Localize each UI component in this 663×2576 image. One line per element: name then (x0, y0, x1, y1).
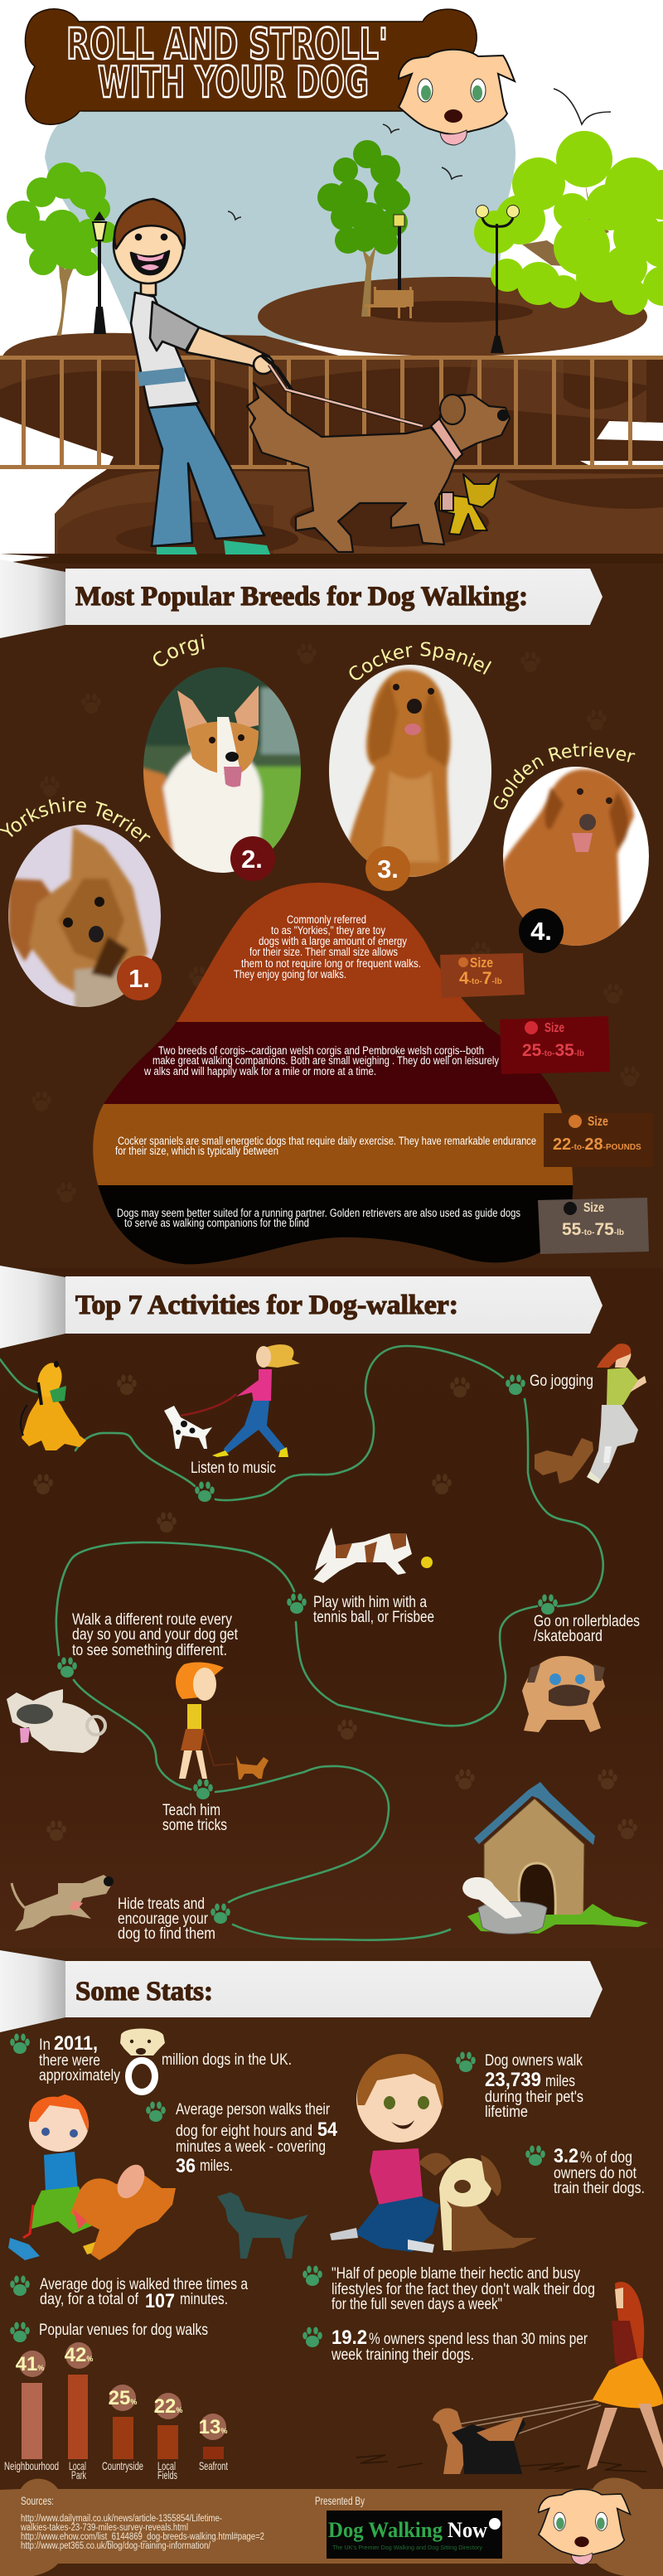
activity labels: Teach him (162, 1802, 220, 1819)
bone (462, 1877, 522, 1919)
number badge 1 (117, 956, 162, 1000)
size tag 2: Size (544, 1021, 564, 1035)
stat: quote: lifestyles for the fact they don't walk their dog (332, 2281, 595, 2298)
footer bone (0, 2478, 663, 2576)
bar chart: venues: 42% (65, 2344, 93, 2366)
boy kneeling with puppy (330, 2054, 537, 2253)
size tag 2 (500, 1016, 610, 1074)
sources: http://www.dailymail.co.uk/news/article-1355854/Lifetime- (21, 2514, 222, 2524)
brown dog running (535, 1438, 593, 1484)
doghouse (462, 1782, 648, 1934)
text: yorkie: for their size. Their small size allows (249, 946, 398, 958)
dog walking now logo: Dog Walking (328, 2518, 443, 2542)
stat: walked three times: day, for a total of (40, 2291, 139, 2308)
size tag 4 (538, 1198, 649, 1254)
dog walking now logo (327, 2511, 502, 2559)
bar chart: venues (4, 2342, 228, 2482)
jogger (587, 1344, 646, 1484)
puppy (443, 2188, 537, 2252)
size tag 1: Size (470, 955, 493, 971)
right tree (474, 131, 663, 315)
stat: 19.2 percent: % owners spend less than 30 mins per (369, 2331, 588, 2348)
ribbon: breeds (0, 559, 603, 638)
orange dog (70, 2176, 176, 2260)
white pug (7, 1689, 105, 1753)
boy with orange dog (8, 2094, 176, 2260)
stat: walked three times: minutes. (180, 2291, 228, 2308)
photo: corgi (143, 667, 301, 873)
left tree (7, 162, 117, 336)
cocker on leash (433, 2408, 472, 2474)
stat: lifetime miles (456, 2052, 583, 2121)
number badge 3 (365, 846, 410, 891)
fence (0, 356, 663, 469)
hill (258, 277, 647, 356)
section background: stats (0, 1948, 663, 2576)
stat: 8 million dogs (10, 2029, 292, 2092)
activity labels: to see something different. (72, 1642, 227, 1659)
small dog (236, 1755, 269, 1779)
activity labels (72, 1373, 640, 1943)
bar chart: venues: 22% (154, 2395, 182, 2418)
man (114, 199, 273, 554)
heading: activities: Top 7 Activities for Dog-walker: (75, 1290, 458, 1320)
number badge 4: 4. (530, 917, 552, 946)
text: corgi: make great walking companions. Both are small weighing . They do well on leisurely (152, 1054, 499, 1067)
text: golden (117, 1207, 520, 1229)
winding green path (0, 1346, 603, 1940)
photo: golden retriever (497, 764, 651, 953)
woman walking two dogs (356, 2282, 663, 2474)
stat: 19.2 percent: 19.2 (332, 2327, 367, 2349)
tennis ball (421, 1557, 433, 1568)
grass (467, 1904, 648, 1934)
red hair (615, 2282, 644, 2366)
photo: yorkshire terrier (7, 822, 164, 1010)
stat: average person (146, 2101, 338, 2177)
stat: walked three times (10, 2276, 248, 2312)
bar chart: venues: 13% (199, 2416, 227, 2438)
size tag 3: Size (588, 1115, 608, 1129)
activity labels: Go jogging (530, 1373, 593, 1390)
stat: walked three times: Average dog is walked three times a (40, 2276, 248, 2293)
dog walking now logo: Now (448, 2518, 487, 2542)
activity labels: some tricks (162, 1817, 227, 1834)
pluto dog (21, 1360, 86, 1450)
text: golden: Dogs may seem better suited for a running partner. Golden retrievers are also used as guide dogs (117, 1207, 520, 1219)
hero illustration (0, 0, 663, 564)
stat: training: owners do not (554, 2165, 637, 2182)
size tag 3: 22-to-28-POUNDS (553, 1135, 641, 1154)
text: golden: to serve as walking companions for the blind (124, 1217, 309, 1229)
stat: 19.2 percent (302, 2327, 588, 2364)
breed name: corgi: Corgi (153, 634, 205, 666)
text: cocker (115, 1135, 536, 1157)
size tag 1: 4-to-7-lb (459, 969, 502, 988)
dog head mascot (399, 50, 515, 145)
text: yorkie: dogs with a large amount of energy (259, 935, 407, 947)
activity labels: /skateboard (534, 1628, 603, 1645)
dalmatian (164, 1406, 212, 1449)
stat: average person: dog for eight hours and (176, 2123, 312, 2140)
stat: walked three times: 107 (145, 2290, 175, 2312)
leash highlight (269, 365, 423, 426)
paw-shaped size panel (83, 879, 580, 1276)
sources: Sources: (21, 2494, 54, 2507)
number badge 2 (230, 836, 275, 881)
breed name: golden retriever: Golden Retriever (494, 743, 635, 809)
activity labels: Listen to music (191, 1460, 276, 1477)
activity labels: dog to find them (118, 1925, 215, 1943)
text: yorkie: Commonly referred (287, 913, 366, 926)
stat: training: 3.2 (554, 2145, 578, 2167)
heading: breeds: Most Popular Breeds for Dog Walking: (75, 582, 528, 612)
section background: breeds (0, 564, 663, 1276)
golden dog (247, 383, 510, 552)
sources (20, 2494, 264, 2551)
stat: average person: miles. (200, 2157, 233, 2175)
leash (261, 355, 423, 426)
activity labels: Hide treats and (118, 1896, 205, 1913)
stat: 8 million dogs: approximately (39, 2067, 120, 2085)
stat: training: % of dog (580, 2149, 632, 2167)
bar chart: venues: 25% (109, 2387, 137, 2409)
text: corgi (143, 1044, 499, 1077)
dark green dog (217, 2192, 308, 2259)
breed name: cocker spaniel: Cocker Spaniel (350, 642, 492, 680)
text: yorkie: them to not require long or frequent walks. (241, 957, 421, 970)
bar chart: venues: Park (71, 2468, 87, 2482)
number badge 2: 2. (241, 845, 263, 874)
stat: quote (302, 2265, 595, 2313)
stat: 19.2 percent: week training their dogs. (331, 2346, 474, 2364)
under-fence terrain (0, 358, 663, 564)
happy running dog (12, 1875, 114, 1931)
stat: 8 million dogs: In (39, 2036, 51, 2054)
size tag 2: 25-to-35-lb (522, 1041, 584, 1060)
bar chart: venues: Neighbourhood (4, 2459, 59, 2472)
stat: training: train their dogs. (554, 2180, 645, 2197)
title bone banner (25, 9, 477, 124)
bar chart: venues: 41% (16, 2353, 44, 2375)
text: yorkie: They enjoy going for walks. (234, 968, 346, 981)
activity labels: Walk a different route every (72, 1611, 232, 1629)
stat: lifetime miles: Dog owners walk (485, 2052, 583, 2070)
text: cocker: for their size, which is typically between (115, 1145, 278, 1157)
centre lamp (394, 215, 404, 292)
activity labels: Go on rollerblades (534, 1613, 640, 1630)
stat: quote: "Half of people blame their hectic and busy (332, 2265, 580, 2283)
activity labels: tennis ball, or Frisbee (313, 1609, 434, 1626)
stat: quote: for the full seven days a week" (332, 2296, 502, 2313)
woman with dalmatian (181, 1344, 300, 1457)
size tag 4: Size (583, 1201, 604, 1215)
section background: activities (0, 1268, 663, 1956)
size tag 1 (440, 953, 525, 998)
ribbon: stats (0, 1950, 603, 2032)
double lamp (476, 206, 519, 353)
bar chart: venues: Local (157, 2459, 176, 2472)
breed name: yorkshire terrier: Yorkshire Terrier (0, 797, 151, 842)
number 8 dog head (120, 2029, 165, 2092)
faint paw marks (33, 1374, 637, 1841)
heading: stats: Some Stats: (75, 1977, 213, 2007)
activity labels: Play with him with a (313, 1594, 427, 1611)
stat: training (525, 2145, 645, 2197)
tan pug (522, 1656, 605, 1732)
bench (365, 287, 414, 318)
text: yorkie (234, 913, 421, 981)
stat: average person: Average person walks their (176, 2101, 331, 2118)
text: cocker: Cocker spaniels are small energetic dogs that require daily exercise. They have remarkable endurance (118, 1135, 536, 1147)
bar chart: venues: Countryside (102, 2459, 143, 2472)
size tag 4: 55-to-75-lb (562, 1220, 624, 1239)
size tag 3 (544, 1113, 653, 1167)
sources: http://www.pet365.co.uk/blog/dog-training-information/ (21, 2541, 211, 2551)
sky (45, 111, 515, 348)
title text: ROLL AND STROLL' (66, 20, 388, 70)
stat: lifetime miles: during their pet's (485, 2089, 583, 2106)
number badge 3: 3. (377, 855, 399, 884)
stat: lifetime miles: miles (545, 2073, 575, 2090)
sources: walkies-takes-23-739-miles-survey-reveals.html (20, 2523, 188, 2533)
text: yorkie: to as "Yorkies," they are toy (271, 924, 385, 937)
small yellow dog (439, 474, 499, 535)
activity labels: day so you and your dog get (72, 1626, 239, 1644)
dog chasing ball (313, 1528, 433, 1583)
stat: venues heading (10, 2322, 208, 2342)
stat: average person: minutes a week - covering (176, 2138, 326, 2156)
centre tree (317, 140, 410, 317)
number badge 4 (519, 908, 564, 953)
stat: lifetime miles: lifetime (485, 2104, 528, 2121)
faint paw texture (31, 643, 640, 1203)
footer dog head (539, 2489, 630, 2564)
girl and small dog (176, 1662, 269, 1779)
number badge 1: 1. (128, 964, 150, 993)
bowl (478, 1901, 547, 1934)
bar chart: venues: Seafront (199, 2459, 228, 2472)
presented by: Presented By (315, 2494, 365, 2507)
ribbon: activities (0, 1266, 603, 1349)
stat: 8 million dogs: million dogs in the UK. (162, 2051, 292, 2069)
dog walking now logo: The UK's Premier Dog Walking and Dog Sitting Directory (332, 2544, 482, 2551)
bar chart: venues: Local (69, 2459, 86, 2472)
stat: average person: 36 (176, 2155, 196, 2177)
stat: 8 million dogs: 2011, (54, 2032, 98, 2055)
stat: average person: 54 (317, 2118, 338, 2141)
photo: cocker spaniel (327, 663, 493, 879)
text: corgi: w alks and will happily walk for a mile or more at a time. (143, 1065, 376, 1077)
activity labels: encourage your (118, 1910, 209, 1928)
bar chart: venues: Fields (157, 2468, 177, 2482)
stat: lifetime miles: 23,739 (485, 2069, 541, 2091)
text: corgi: Two breeds of corgis--cardigan welsh corgis and Pembroke welsh corgis--both (158, 1044, 484, 1057)
left lamp (93, 211, 106, 334)
sources: http://www.ehow.com/list_6144869_dog-breeds-walking.html#page=2 (21, 2532, 264, 2542)
birds (228, 89, 611, 220)
green paw waypoints (57, 1374, 558, 1924)
left ground (2, 333, 348, 358)
title text line 2: WITH YOUR DOG (98, 58, 369, 108)
stat: venues heading: Popular venues for dog walks (39, 2322, 208, 2339)
stat: 8 million dogs: there were (39, 2052, 100, 2070)
